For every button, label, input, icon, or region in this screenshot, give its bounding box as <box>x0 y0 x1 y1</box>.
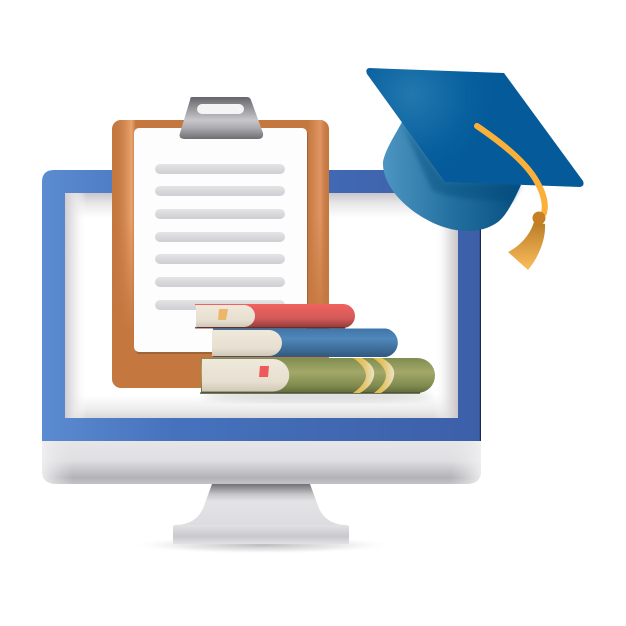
book shadow <box>203 390 433 402</box>
monitor blue frame <box>42 170 481 441</box>
clipboard board <box>112 120 329 388</box>
bookmark red <box>259 366 269 377</box>
monitor chin <box>42 441 481 484</box>
clipboard <box>112 97 329 388</box>
book bands <box>353 358 374 393</box>
red book <box>195 304 355 328</box>
green book <box>200 358 435 394</box>
monitor stand base <box>173 525 349 544</box>
clip <box>180 97 263 139</box>
cap cord <box>477 126 545 213</box>
blue book pages <box>212 330 282 356</box>
illustration: online education <box>42 68 584 552</box>
paper shadow <box>136 131 308 354</box>
graduation cap <box>366 68 584 270</box>
stack of books <box>195 304 435 402</box>
monitor screen <box>65 193 458 418</box>
monitor stand neck <box>175 484 347 525</box>
text lines <box>155 164 285 310</box>
cap shadow on skull <box>402 124 521 202</box>
blue book <box>212 328 398 357</box>
floor shadow <box>127 536 397 554</box>
monitor <box>42 170 481 554</box>
tassel <box>508 222 545 270</box>
cap skull <box>383 122 521 231</box>
tassel knob <box>532 212 546 224</box>
cap board <box>366 68 584 187</box>
green book pages <box>202 359 289 392</box>
paper sheet <box>134 128 307 352</box>
red book pages <box>196 305 255 327</box>
bookmark orange <box>218 309 228 320</box>
